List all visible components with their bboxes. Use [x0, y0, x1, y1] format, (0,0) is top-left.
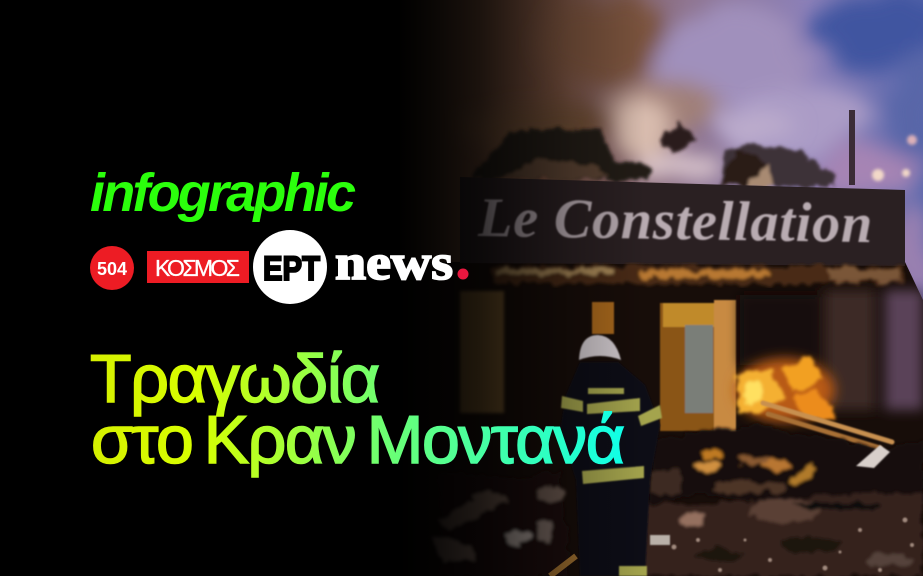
logo: ΕΡΤ news: EPT	[263, 250, 320, 288]
helmet	[579, 335, 621, 360]
badge: issue 504	[90, 246, 134, 290]
fallen plank	[550, 556, 576, 576]
wooden planks	[763, 403, 892, 448]
logo: ΕΡΤ news: news	[335, 234, 453, 290]
reflective stripes	[561, 388, 662, 576]
rubble pile	[650, 425, 923, 505]
fire	[735, 358, 836, 422]
firefighter	[560, 335, 662, 576]
title	[90, 341, 625, 478]
orange doorway	[592, 300, 736, 432]
building front	[400, 262, 923, 576]
burnt awning	[490, 266, 905, 284]
left rubble	[430, 470, 570, 576]
night sky	[400, 0, 923, 320]
sign board	[460, 177, 905, 266]
collapsed roof	[470, 124, 835, 188]
body	[560, 362, 660, 576]
left pillar	[460, 291, 504, 413]
street ground	[640, 492, 923, 576]
distant lights	[872, 135, 917, 181]
photo: burning bar	[400, 0, 923, 576]
white debris piece	[856, 445, 890, 468]
sign text: Le Constellation	[477, 187, 873, 255]
badge: issue 504: 504	[97, 259, 127, 279]
street speckles	[650, 518, 914, 572]
title line 2: στο Κραν Μοντανά	[91, 402, 625, 478]
title line 1: Τραγωδία	[90, 341, 380, 417]
heading: infographic: infographic	[90, 163, 356, 223]
white smoke plume	[612, 102, 790, 179]
chimney pole	[849, 110, 855, 185]
category label: ΚΟΣΜΟΣ	[147, 251, 249, 283]
category label: ΚΟΣΜΟΣ: ΚΟΣΜΟΣ	[155, 255, 240, 281]
logo: ΕΡΤ news	[253, 230, 468, 304]
smoke clouds	[470, 0, 923, 310]
right interior smoke	[740, 290, 923, 410]
